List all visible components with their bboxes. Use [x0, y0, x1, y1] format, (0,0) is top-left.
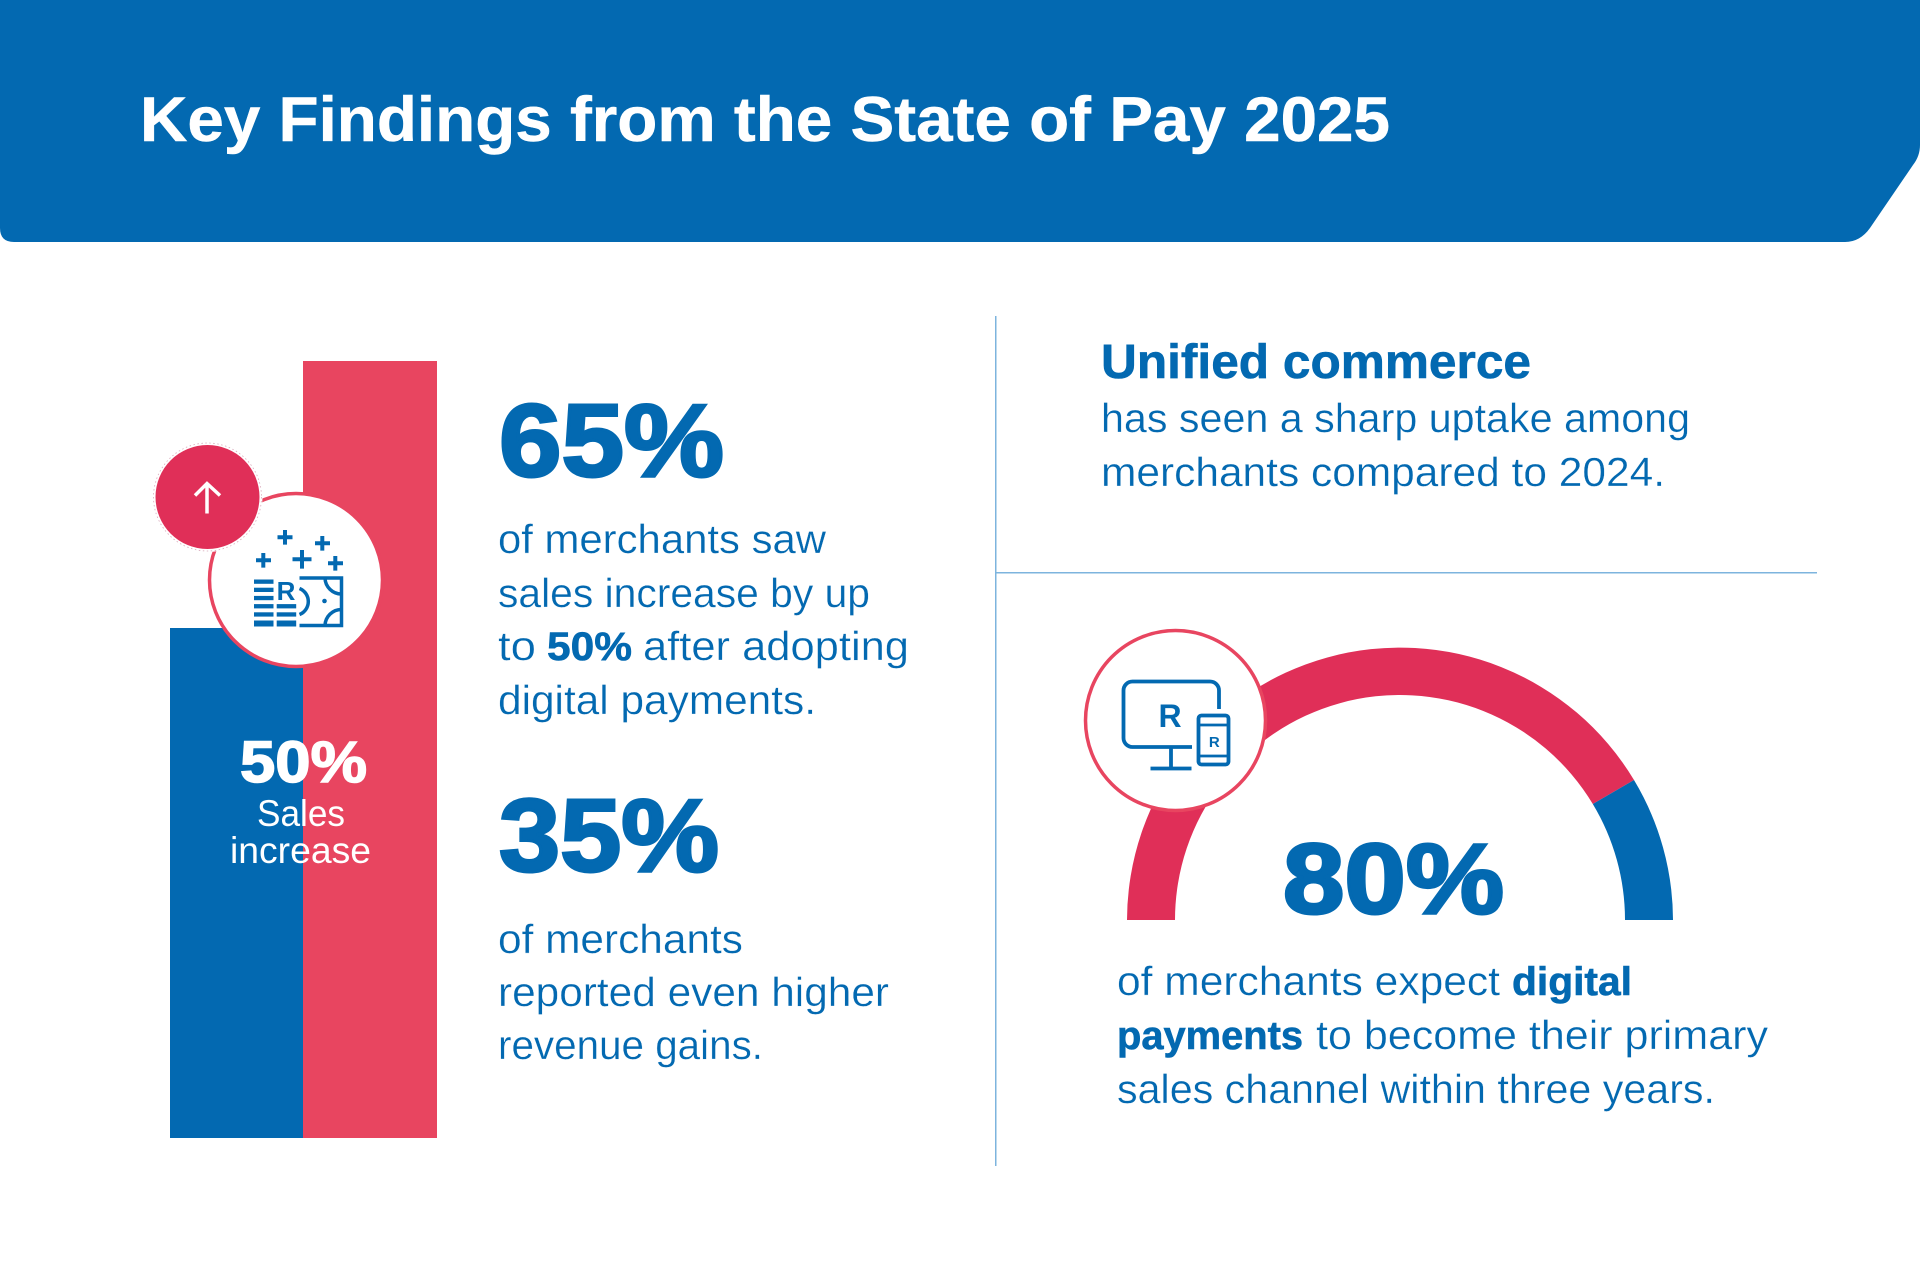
bar label: 50% sales increase: increase [230, 830, 371, 871]
text block: unified commerce: has seen a sharp uptake among [1101, 395, 1690, 441]
stat: 35%: of merchants [498, 916, 743, 962]
stat: 65%: 50% [547, 625, 632, 669]
text block: digital payments: payments [1117, 1014, 1303, 1058]
stat: 65%: of merchants saw [498, 516, 826, 562]
bar label: 50% sales increase [230, 730, 371, 871]
stat: 35% [498, 778, 889, 1068]
stat: 65%: 65% [499, 383, 724, 498]
bar label: 50% sales increase: Sales [257, 793, 345, 834]
text block: digital payments: digital [1512, 960, 1632, 1004]
text block: unified commerce: merchants compared to 2024. [1101, 449, 1665, 495]
text block: unified commerce: Unified commerce [1101, 336, 1531, 389]
stat: 65% [498, 383, 909, 723]
icon: up arrow badge [152, 442, 262, 552]
header banner [0, 0, 1920, 242]
gauge arc: blue segment [1593, 780, 1673, 920]
text block: digital payments [1117, 958, 1769, 1112]
text block: digital payments: sales channel within three years. [1117, 1066, 1715, 1112]
icon: money and plus signs [210, 494, 382, 666]
icon: monitor and phone: R [1158, 698, 1182, 734]
stat: 65%: digital payments. [498, 677, 816, 723]
stat: 35%: 35% [499, 778, 719, 893]
horizontal divider [995, 572, 1817, 574]
text block: digital payments: to become their primary [1316, 1012, 1769, 1058]
stat: 65%: to [498, 623, 536, 669]
text block: unified commerce [1101, 336, 1690, 495]
vertical divider [995, 316, 996, 1166]
icon: money and plus signs: R [277, 576, 296, 606]
bar: baseline (blue) [170, 628, 303, 1138]
icon: monitor and phone: R [1209, 734, 1220, 751]
stat: 35%: revenue gains. [498, 1022, 763, 1068]
gauge arc: red segment [1127, 648, 1634, 920]
bar: increased (pink) [303, 361, 437, 1138]
stat: 65%: sales increase by up [498, 570, 870, 616]
gauge chart: 80% [1086, 630, 1673, 934]
text block: digital payments: of merchants expect [1117, 958, 1501, 1004]
gauge value: 80% [1283, 823, 1504, 934]
stat: 65%: after adopting [643, 623, 909, 669]
icon: monitor and phone [1086, 630, 1266, 810]
title: Key Findings from the State of Pay 2025 [140, 85, 1390, 155]
stat: 35%: reported even higher [498, 969, 889, 1015]
panel: bar chart sales increase [152, 361, 437, 1138]
bar label: 50% sales increase: 50% [240, 730, 367, 795]
